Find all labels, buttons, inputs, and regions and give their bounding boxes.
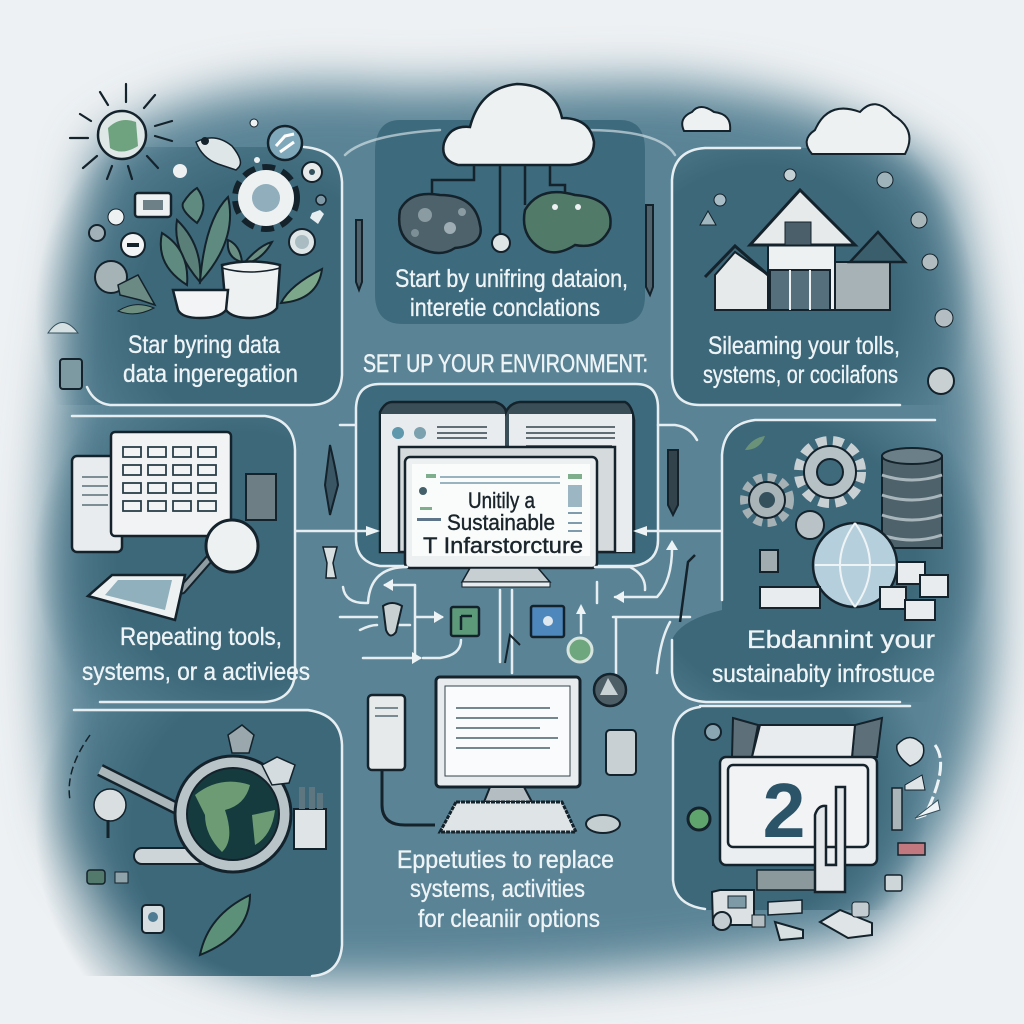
monitor title: Sustainable <box>447 510 555 535</box>
heading: unifying data <box>395 265 628 322</box>
heading: replace systems: Eppetuties to replace <box>397 846 614 874</box>
heading: streamlining tools <box>703 332 900 389</box>
panel: monitor two <box>673 706 1000 940</box>
icon: open book <box>380 402 634 552</box>
icon: keyboard <box>440 802 576 832</box>
heading: repeating tools: Repeating tools, <box>120 623 282 651</box>
heading: streamlining tools: systems, or cocilafons <box>703 361 898 389</box>
icon: stacked cylinder <box>882 448 942 548</box>
monitor title: Unitily a <box>468 488 536 513</box>
connector arrows <box>295 425 722 677</box>
icon: house <box>705 190 905 310</box>
icon: phone <box>606 730 636 775</box>
icon: globe <box>813 523 897 607</box>
icon: pen right <box>646 205 653 295</box>
icon: device on table <box>88 575 185 620</box>
monitor title: T Infarstorcture <box>423 533 583 558</box>
icon: mouse <box>586 815 620 833</box>
icon: monitor <box>399 447 615 587</box>
panel: expanding infrastructure <box>672 420 1000 702</box>
icon: tablet with table <box>72 432 231 552</box>
panel: global search <box>30 710 342 976</box>
icon: green blob right <box>524 192 611 252</box>
icon: decorations <box>700 169 954 394</box>
icon: computer with number: 2 <box>763 768 805 854</box>
icon: small map <box>105 580 172 610</box>
icon: potted plants <box>161 188 322 318</box>
icon: sun <box>70 84 172 179</box>
icon: computer with number <box>720 718 882 892</box>
icon: truck <box>712 890 765 930</box>
icon: clouds <box>682 104 909 154</box>
icon: small left items <box>48 322 82 389</box>
icon: blue dot <box>705 724 721 740</box>
icon: blocks <box>760 550 948 620</box>
heading: expanding infrastructure <box>712 626 935 688</box>
icon: green button <box>688 808 710 830</box>
heading: replace systems: systems, activities <box>410 875 585 903</box>
heading: data integration: Star byring data <box>128 331 280 359</box>
heading: replace systems: for cleaniir options <box>418 905 600 933</box>
panel: data integration <box>30 84 342 405</box>
heading: data integration: data ingeregation <box>123 360 298 388</box>
icon: gear <box>237 169 295 227</box>
icon: box <box>246 474 276 520</box>
panel: repeating tools <box>30 415 310 702</box>
heading: expanding infrastructure: Ebdannint your <box>747 626 935 654</box>
section: replace systems <box>368 677 636 933</box>
icon: right side items <box>885 738 941 891</box>
icon: camera <box>196 137 240 170</box>
heading: repeating tools <box>82 623 310 686</box>
heading: replace systems <box>397 846 614 933</box>
icon: cloud <box>432 84 594 252</box>
icon: magnifier with globe <box>100 756 291 872</box>
icon: small badges <box>89 193 171 314</box>
icon: leaf <box>745 436 765 450</box>
heading: unifying data: Start by unifring dataion, <box>395 265 628 293</box>
icon: pencils by centre <box>323 445 695 622</box>
monitor title <box>423 488 583 558</box>
heading: data integration <box>123 331 298 388</box>
icon: badge cluster <box>173 119 326 255</box>
heading: unifying data: interetie conclations <box>410 294 600 322</box>
icon: small central chips <box>383 603 626 706</box>
heading: expanding infrastructure: sustainabity infrostuce <box>712 660 935 688</box>
heading: repeating tools: systems, or a activiees <box>82 658 310 686</box>
heading: set up your environment: SET UP YOUR ENVIRONMENT: <box>363 350 648 378</box>
icon: magnifier <box>182 520 258 590</box>
icon: pen left <box>356 220 362 290</box>
panel: unifying data <box>345 84 675 324</box>
icon: dark blob left <box>399 194 481 253</box>
icon: desktop computer <box>436 677 580 802</box>
heading: streamlining tools: Sileaming your tolls, <box>708 332 900 360</box>
icon: blocks and papers <box>768 900 872 940</box>
icon: gears <box>745 442 860 539</box>
icon: card reader <box>368 695 435 825</box>
icon: scattered objects <box>69 725 326 955</box>
panel: central sustainable infrastructure <box>356 384 658 587</box>
panel: streamlining tools <box>672 104 1000 405</box>
